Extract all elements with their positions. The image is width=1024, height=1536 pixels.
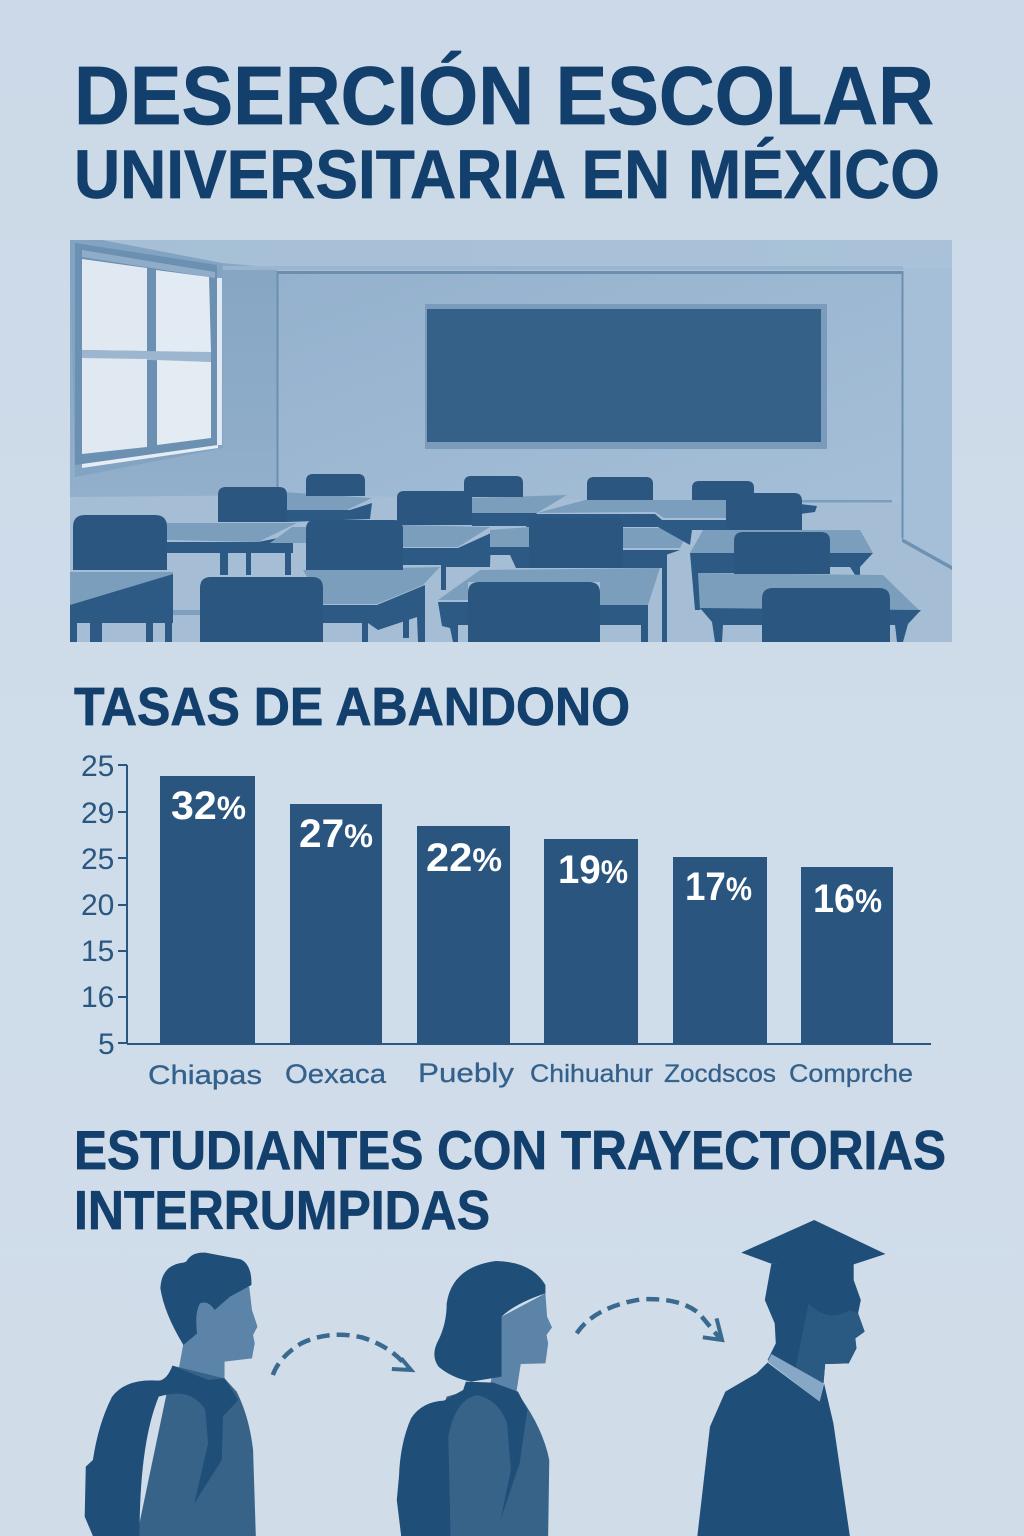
- category labels: Puebly: [418, 1058, 515, 1088]
- category labels: Zocdscos: [664, 1060, 776, 1088]
- title: DESERCIÓN ESCOLAR: [74, 49, 934, 142]
- category labels: Comprche: [789, 1060, 913, 1088]
- graduate with cap and gown: [697, 1220, 885, 1536]
- y axis: 29: [81, 797, 114, 830]
- heading: estudiantes con trayectorias interrumpidas: ESTUDIANTES CON TRAYECTORIAS: [74, 1119, 946, 1181]
- bar values: 22%: [426, 836, 502, 880]
- heading: estudiantes con trayectorias interrumpidas: INTERRUMPIDAS: [74, 1179, 490, 1241]
- student with backpack: [85, 1253, 257, 1536]
- y axis: [81, 750, 127, 1061]
- student with long hair: [397, 1261, 552, 1536]
- chairs: [73, 474, 890, 642]
- category labels: Chihuahur: [530, 1060, 653, 1088]
- category labels: Oexaca: [285, 1059, 387, 1089]
- category labels: Chiapas: [148, 1060, 262, 1090]
- blackboard: [425, 304, 827, 449]
- y axis: 5: [98, 1028, 115, 1061]
- arrow: [273, 1335, 411, 1375]
- bar values: 17%: [685, 865, 752, 909]
- title: [74, 49, 940, 213]
- y axis: 25: [81, 843, 114, 876]
- bars: [160, 776, 893, 1044]
- bar values: [171, 784, 882, 921]
- bar values: 32%: [171, 784, 246, 828]
- heading: estudiantes con trayectorias interrumpidas: [74, 1119, 946, 1241]
- figures: [85, 1220, 885, 1536]
- y axis: 20: [81, 889, 114, 922]
- y axis: 15: [81, 935, 114, 968]
- bar values: 19%: [558, 848, 628, 892]
- arrow: [577, 1299, 722, 1340]
- title: UNIVERSITARIA EN MÉXICO: [74, 136, 940, 213]
- bar chart: [81, 750, 931, 1090]
- bar values: 16%: [813, 877, 882, 921]
- window: [70, 240, 223, 477]
- bar values: 27%: [299, 812, 373, 856]
- category labels: [148, 1058, 913, 1090]
- classroom photo: [70, 240, 952, 642]
- y axis: 16: [81, 981, 114, 1014]
- desks: [70, 492, 921, 642]
- y axis: 25: [81, 750, 114, 783]
- heading: tasas de abandono: TASAS DE ABANDONO: [74, 677, 630, 737]
